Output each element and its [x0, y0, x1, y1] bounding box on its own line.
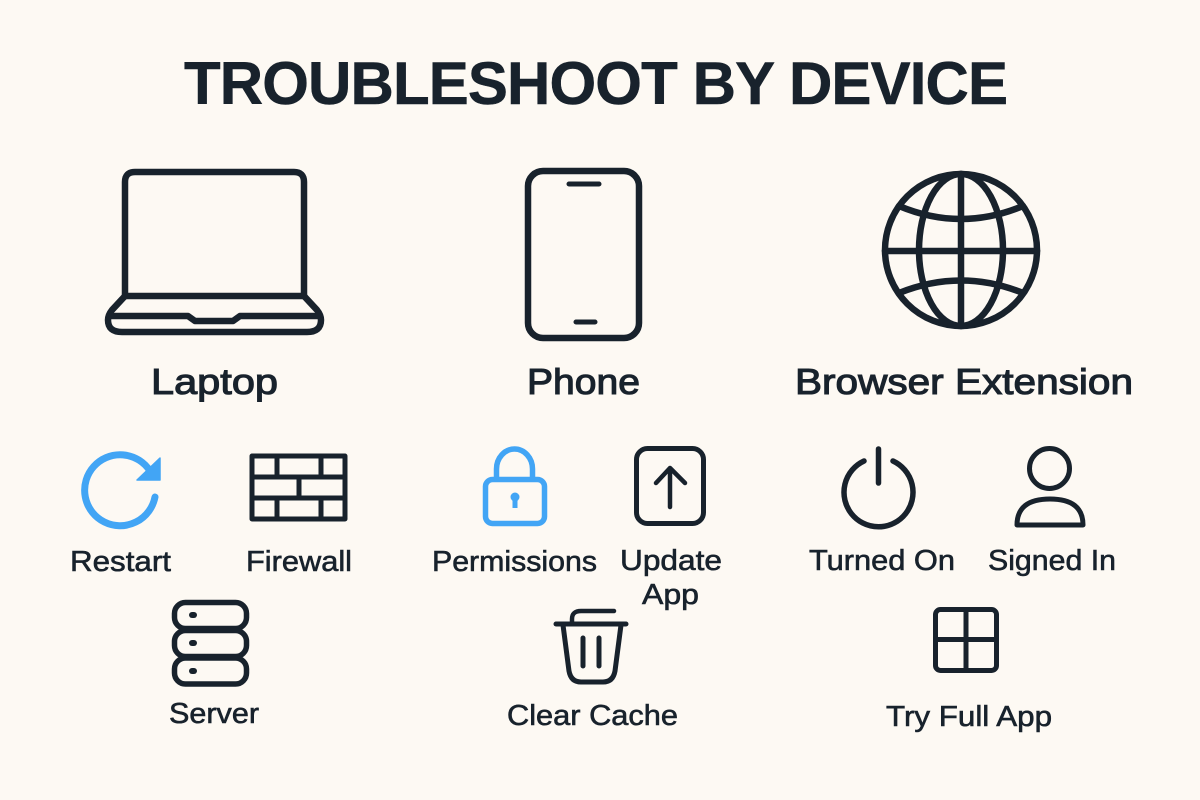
icon: firewall	[252, 456, 345, 519]
panel: laptop	[70, 172, 352, 730]
heading: Laptop: Laptop	[151, 361, 278, 402]
label: Update App: Update	[620, 545, 722, 577]
icon: server	[174, 602, 246, 684]
icon: globe	[885, 174, 1037, 326]
icon: clear cache trash	[556, 611, 626, 682]
icon: try full app grid	[936, 610, 996, 670]
icon: phone	[528, 171, 639, 338]
heading: Browser Extension: Browser Extension	[795, 361, 1133, 402]
label: Permissions: Permissions	[432, 546, 597, 578]
label: Signed In: Signed In	[988, 545, 1116, 577]
icon: permissions lock	[486, 449, 544, 524]
panel: browser extension	[795, 174, 1133, 733]
label: Turned On: Turned On	[809, 545, 955, 577]
label: Server: Server	[169, 698, 259, 730]
label: Restart: Restart	[70, 546, 171, 578]
label: Firewall: Firewall	[246, 546, 352, 578]
icon: restart	[85, 455, 160, 526]
icon: user	[1017, 448, 1083, 525]
icon: power	[844, 449, 913, 527]
panel: phone	[432, 171, 722, 732]
icon: laptop	[108, 172, 321, 332]
label: Clear Cache: Clear Cache	[507, 700, 678, 732]
label: Update App: App	[642, 579, 699, 611]
icon: update app	[636, 448, 704, 524]
label: Update App	[620, 545, 722, 611]
title: TROUBLESHOOT BY DEVICE	[184, 50, 1008, 117]
heading: Phone: Phone	[527, 361, 640, 402]
label: Try Full App: Try Full App	[886, 701, 1052, 733]
